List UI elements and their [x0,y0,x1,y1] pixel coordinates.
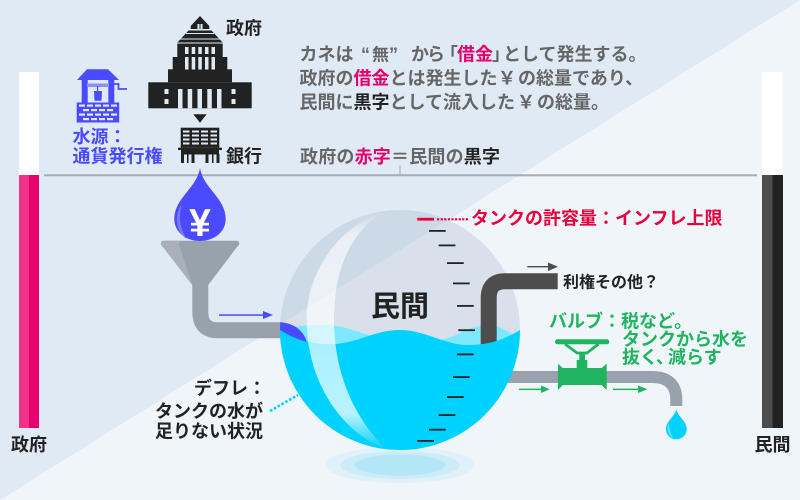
icon: government building [148,16,252,108]
explanation text: 政府の [300,68,354,88]
arrow: government to bank [193,114,207,123]
explanation text: 黒字として流入した [354,92,515,112]
explanation text: 」 [492,44,503,64]
label: private bar: 民間 [754,435,790,455]
explanation text: “ [361,44,370,64]
explanation text: の総量であり、 [518,68,643,88]
valve label: 、 [656,348,674,368]
arrows: outflow [519,386,648,393]
highlight band [307,212,387,450]
explanation text: として発生する。 [503,44,646,64]
explanation text: ” [389,44,398,64]
valve label: 減らす [668,346,722,368]
funnel and inlet pipe [161,241,282,330]
outlet pipe [505,377,676,406]
icon: bank [178,128,222,163]
explanation text: 無 [372,46,389,64]
icon: well [77,69,127,122]
explanation text: 民間に [300,92,354,112]
baseline divider [44,165,757,176]
label: bank: 銀行 [226,146,262,166]
tank: sphere [280,210,558,460]
icon: valve [555,339,609,390]
arrow: rent outflow [527,262,558,271]
label: seigniorage: 利権その他？ [563,272,659,292]
icon: yen drop [174,168,226,245]
label: water source [72,127,162,166]
inflow water patch [280,322,307,342]
deflation callout: デフレ： [194,378,266,398]
valve label: バルブ：税など。 [549,310,692,332]
deflation callout [155,378,298,442]
label: tank capacity: タンクの許容量：インフレ上限 [471,208,722,228]
yen sign: ¥ [189,202,211,245]
explanation text: から [411,44,443,64]
water [280,322,520,460]
explanation text: ￥ [498,68,516,88]
sphere glass [280,210,520,450]
tank scale ticks [417,230,475,442]
explanation text [300,44,646,112]
valve label [549,310,748,368]
deflation callout: 足りない状況 [155,422,263,442]
icon: water drop [666,409,687,439]
valve label: タンクから水を [622,330,748,350]
label: water source: 水源： [72,127,126,147]
equation text: 政府の赤字＝民間の黒字 [300,147,500,167]
right bar: private sector [762,72,783,428]
valve label: 抜く [622,348,658,368]
deflation callout: タンクの水が [155,400,263,422]
dark outlet pipe [489,281,558,350]
explanation text: 「 [440,44,458,64]
tank label: 民間 [371,291,429,323]
explanation text: 借金 [457,44,493,64]
explanation text: ￥ [517,92,535,112]
explanation text: カネは [300,44,354,64]
inflation limit marker [417,218,468,221]
label: water source: 通貨発行権 [72,146,162,166]
label: government: 政府 [226,18,262,38]
back wave [280,325,520,360]
label: government bar: 政府 [11,435,47,455]
explanation text: 借金とは発生した [354,68,498,88]
explanation text: の総量。 [537,92,609,112]
left bar: government [19,72,39,428]
arrow: inflow [219,311,273,319]
tank shadow [325,447,475,483]
